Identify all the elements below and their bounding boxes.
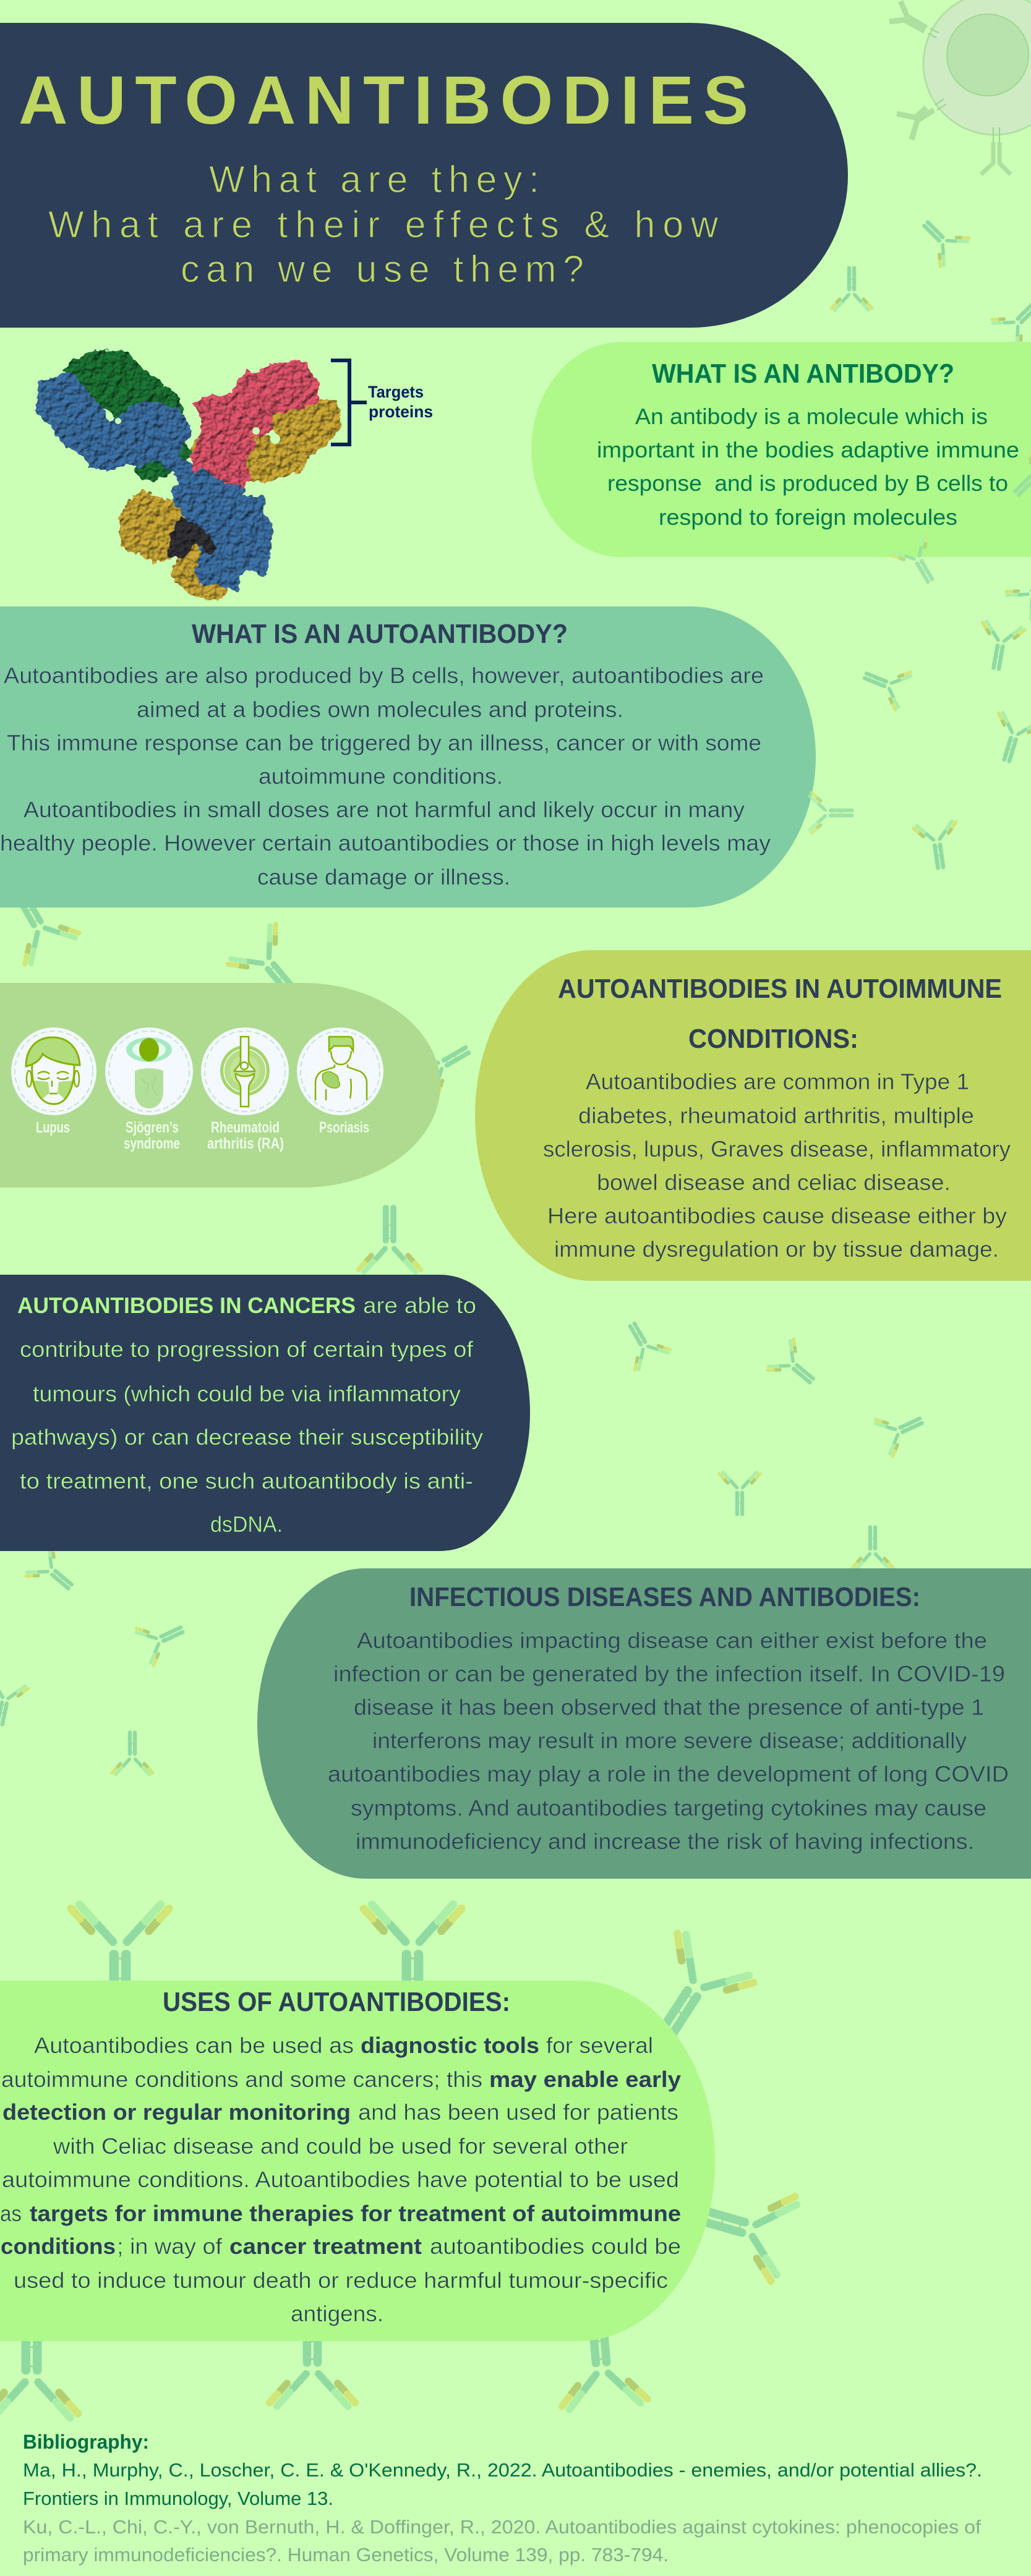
body text: contribute to progression of certain types of — [20, 1337, 474, 1362]
panel: infectious diseases and antibodies — [257, 1568, 1031, 1879]
icon: lupus — [11, 1027, 96, 1115]
heading: WHAT IS AN AUTOANTIBODY? — [192, 619, 568, 649]
body text: Here autoantibodies cause disease either by — [547, 1203, 1007, 1228]
callout: targets proteins bracket: Targets — [368, 383, 424, 401]
icon: psoriasis — [297, 1027, 383, 1115]
subtitle — [48, 158, 719, 290]
body text: cause damage or illness. — [257, 864, 510, 890]
callout: targets proteins bracket — [331, 360, 433, 444]
icon labels — [36, 1119, 369, 1152]
body text: Autoantibodies impacting disease can either exist before the — [357, 1628, 987, 1653]
body text: autoimmune conditions. — [259, 763, 503, 789]
icon: Sjogren's syndrome — [105, 1027, 193, 1115]
body text: and has been used for patients — [358, 2099, 678, 2125]
body text — [11, 1293, 483, 1537]
icon: B cell with surface antibodies — [889, 0, 1031, 174]
bibliography — [23, 2431, 982, 2565]
heading: WHAT IS AN ANTIBODY? — [652, 359, 954, 389]
bibliography: primary immunodeficiencies?. Human Genetics, Volume 139, pp. 783-794. — [23, 2544, 669, 2565]
body text: Autoantibodies are common in Type 1 — [586, 1069, 969, 1094]
body text: symptoms. And autoantibodies targeting cytokines may cause — [351, 1795, 986, 1821]
subtitle: can we use them? — [181, 248, 584, 290]
body text: healthy people. However certain autoantibodies or those in high levels may — [0, 830, 771, 856]
body text: ; in way of — [117, 2234, 223, 2259]
body text — [0, 2033, 681, 2326]
body text: This immune response can be triggered by an illness, cancer or with some — [7, 730, 761, 755]
bibliography: Bibliography: — [23, 2431, 149, 2453]
body text: autoantibodies could be — [430, 2234, 681, 2259]
body text: are able to — [363, 1293, 476, 1318]
panel: autoantibodies in cancers — [0, 1275, 530, 1551]
body text: respond to foreign molecules — [659, 504, 957, 530]
body text: targets for immune therapies for treatment of autoimmune — [30, 2201, 681, 2226]
body text: conditions — [1, 2234, 116, 2259]
antibodies overlapping panels — [806, 445, 1031, 836]
heading: INFECTIOUS DISEASES AND ANTIBODIES: — [409, 1582, 920, 1612]
body text: autoimmune conditions and some cancers; this — [1, 2067, 482, 2092]
body text: as — [0, 2201, 22, 2226]
body text: cancer treatment — [229, 2234, 422, 2259]
panel: uses of autoantibodies — [0, 1981, 715, 2341]
heading: AUTOANTIBODIES IN AUTOIMMUNE — [558, 974, 1002, 1004]
body text — [543, 1069, 1011, 1262]
body text: autoimmune conditions. Autoantibodies have potential to be used — [2, 2167, 679, 2192]
body text: immune dysregulation or by tissue damage. — [554, 1236, 999, 1262]
body text: immunodeficiency and increase the risk of having infections. — [356, 1829, 974, 1854]
body text: diabetes, rheumatoid arthritis, multiple — [578, 1103, 974, 1128]
body text: autoantibodies may play a role in the development of long COVID — [328, 1761, 1009, 1787]
icon labels: Rheumatoid — [211, 1119, 280, 1136]
subtitle: What are they: — [209, 158, 539, 200]
icon labels: Sjögren’s — [126, 1119, 179, 1136]
body text: used to induce tumour death or reduce harmful tumour-specific — [14, 2268, 668, 2293]
heading — [558, 974, 1002, 1054]
body text: Autoantibodies in small doses are not harmful and likely occur in many — [24, 797, 745, 822]
body text: pathways) or can decrease their susceptibility — [11, 1424, 483, 1450]
panel: autoantibodies in autoimmune conditions — [475, 950, 1031, 1281]
callout: targets proteins bracket: proteins — [369, 402, 433, 421]
body text: infection or can be generated by the infection itself. In COVID-19 — [333, 1661, 1005, 1686]
heading: CONDITIONS: — [688, 1024, 858, 1054]
body text: aimed at a bodies own molecules and proteins. — [137, 697, 623, 722]
bibliography: Ma, H., Murphy, C., Loscher, C. E. & O'Kennedy, R., 2022. Autoantibodies - enemies, and/or potential allies?. — [23, 2459, 982, 2481]
icon labels: arthritis (RA) — [207, 1135, 284, 1152]
body text: important in the bodies adaptive immune — [597, 437, 1019, 462]
icon labels: Lupus — [36, 1119, 70, 1136]
body text: dsDNA. — [210, 1511, 283, 1537]
body text: bowel disease and celiac disease. — [597, 1170, 951, 1195]
icon labels: syndrome — [124, 1135, 180, 1152]
subtitle: What are their effects & how — [48, 203, 719, 245]
body text: may enable early — [489, 2067, 681, 2092]
panel: what is an antibody — [531, 342, 1031, 557]
body text — [328, 1628, 1009, 1854]
title: AUTOANTIBODIES — [19, 62, 748, 138]
body text: response and is produced by B cells to — [607, 470, 1008, 496]
body text: Autoantibodies can be used as — [34, 2033, 354, 2058]
icon labels: Psoriasis — [319, 1119, 369, 1136]
panel: autoimmune condition icons — [0, 983, 440, 1188]
body text: to treatment, one such autoantibody is anti- — [20, 1468, 473, 1494]
body text: with Celiac disease and could be used for several other — [53, 2133, 628, 2159]
panel: what is an autoantibody — [0, 606, 816, 908]
image: antibody molecule surface model — [38, 352, 339, 598]
body text: sclerosis, lupus, Graves disease, inflammatory — [543, 1136, 1011, 1162]
bibliography: Frontiers in Immunology, Volume 13. — [23, 2488, 333, 2509]
body text: Autoantibodies are also produced by B cells, however, autoantibodies are — [4, 663, 764, 688]
body text: disease it has been observed that the presence of anti-type 1 — [354, 1694, 984, 1720]
body text: detection or regular monitoring — [2, 2099, 351, 2125]
body text: tumours (which could be via inflammatory — [33, 1381, 461, 1406]
panel: title — [0, 23, 848, 328]
body text: interferons may result in more severe disease; additionally — [372, 1728, 967, 1753]
body text — [597, 404, 1019, 530]
body text: diagnostic tools — [361, 2033, 539, 2058]
body text — [0, 663, 771, 890]
icon: rheumatoid arthritis — [201, 1027, 289, 1115]
body text: An antibody is a molecule which is — [635, 404, 988, 429]
body text: antigens. — [291, 2301, 383, 2326]
body text: for several — [546, 2033, 653, 2058]
body text: AUTOANTIBODIES IN CANCERS — [17, 1293, 356, 1318]
bibliography: Ku, C.-L., Chi, C.-Y., von Bernuth, H. & Doffinger, R., 2020. Autoantibodies against cytokines: phenocopies of — [23, 2516, 981, 2538]
heading: USES OF AUTOANTIBODIES: — [163, 1987, 510, 2017]
